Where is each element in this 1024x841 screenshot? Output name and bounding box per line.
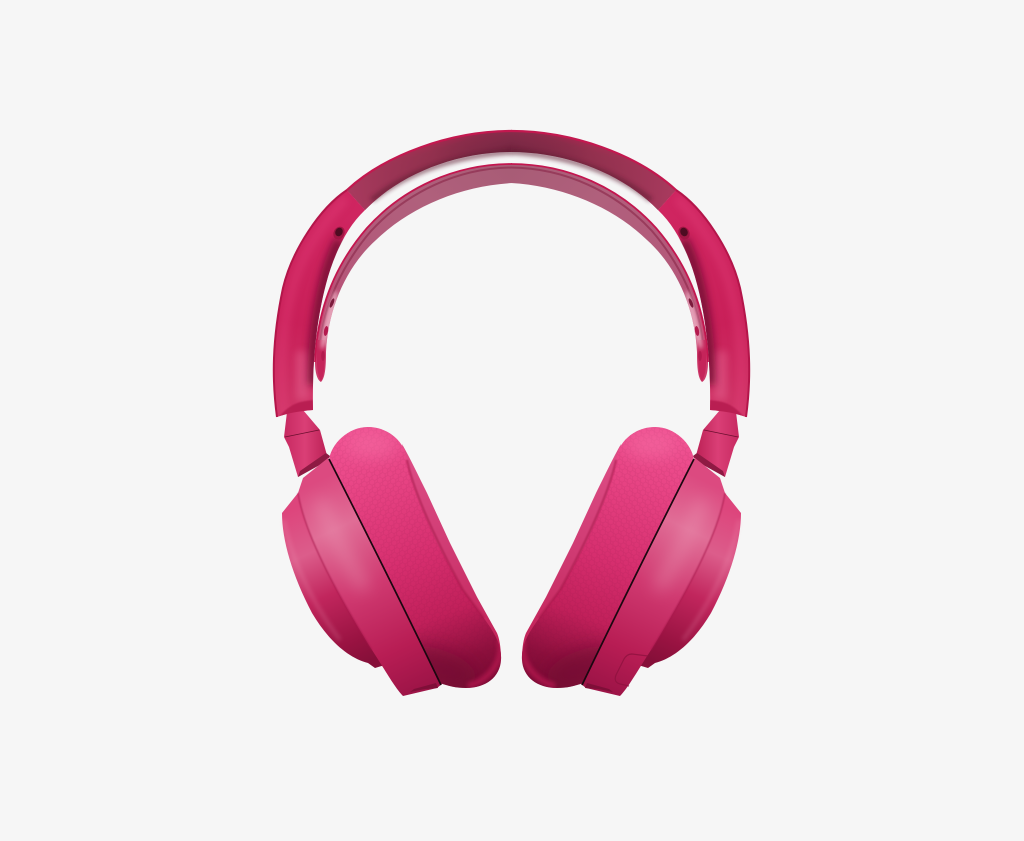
side button bbox=[615, 654, 648, 686]
headset left side bbox=[274, 131, 512, 698]
illustration: pink over-ear headset bbox=[272, 130, 750, 696]
headset right side bbox=[511, 131, 749, 698]
